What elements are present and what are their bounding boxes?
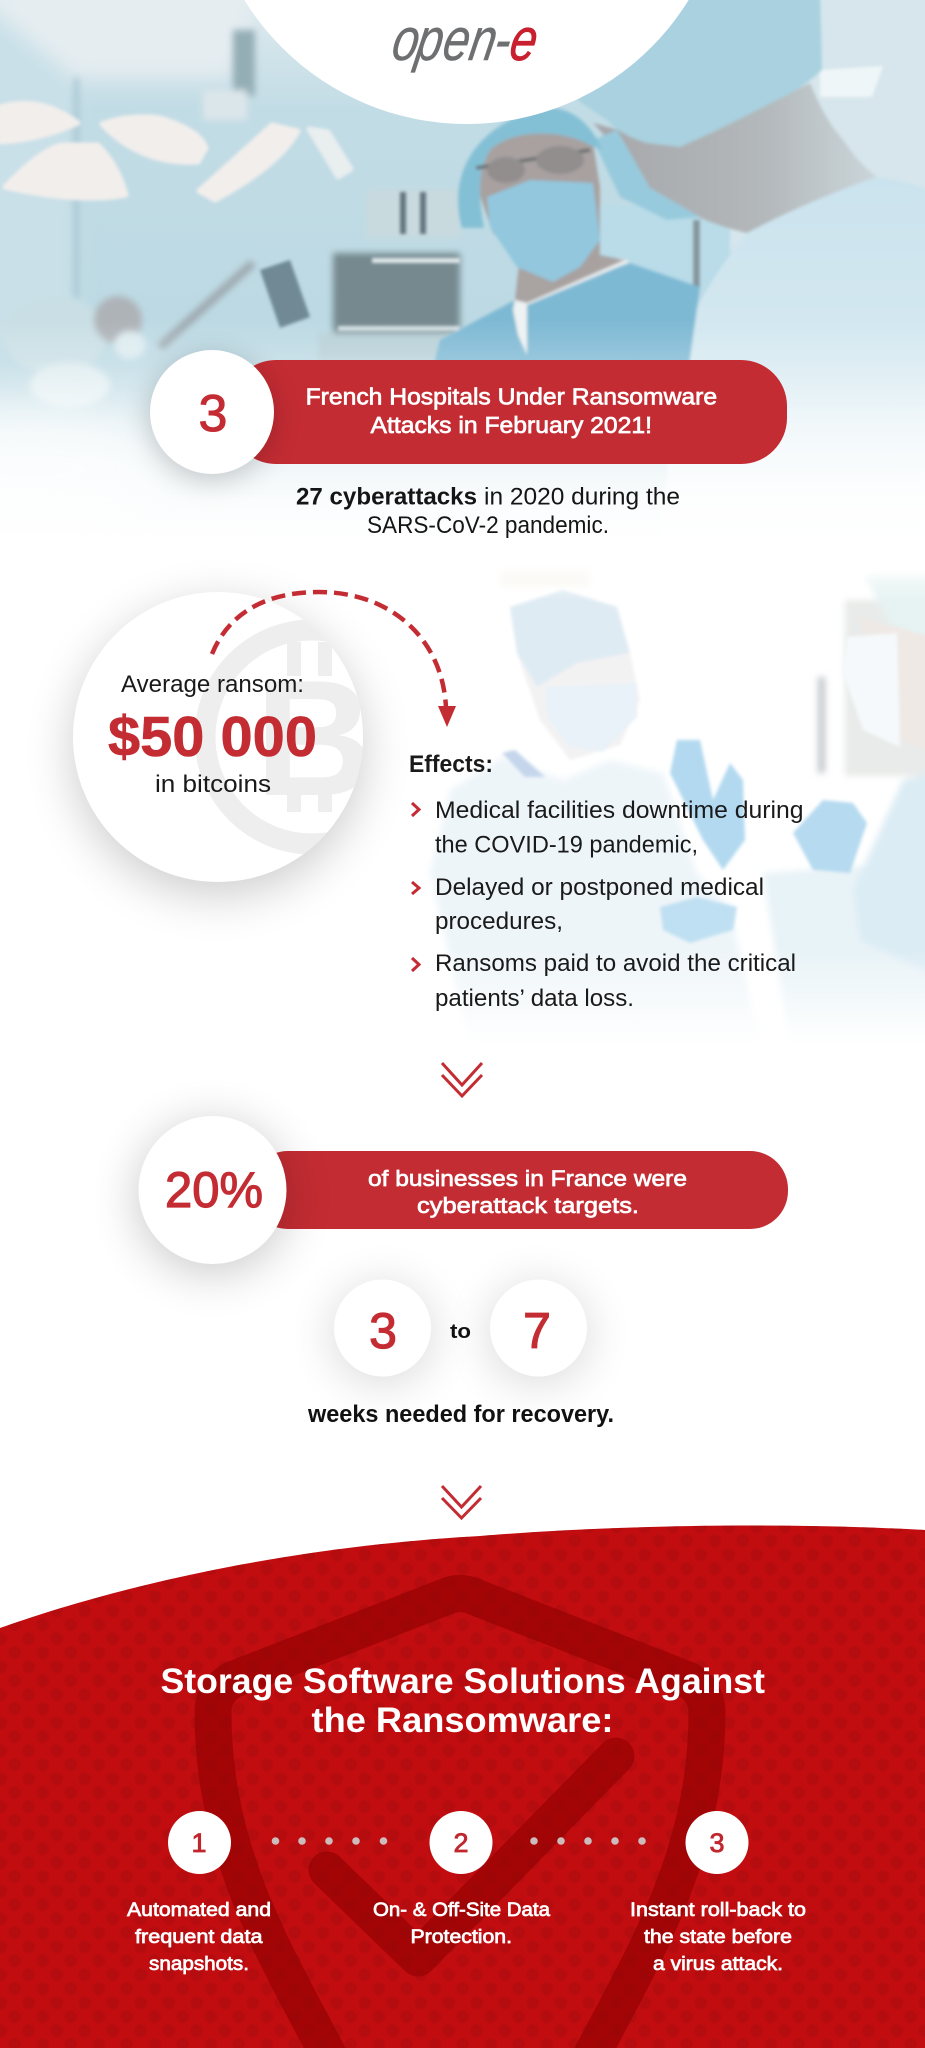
item 1: Medical facilities downtime during <box>435 797 804 824</box>
item 2: Delayed or postponed medical <box>435 874 764 901</box>
step 2: Protection. <box>410 1927 512 1948</box>
ransom text: Average ransom: <box>121 671 304 698</box>
heading <box>160 1662 765 1740</box>
ransom text: $50 000 <box>108 705 317 769</box>
step 1 <box>127 1811 271 1975</box>
banner: 20% of businesses <box>138 1116 788 1272</box>
item 3: patients’ data loss. <box>435 985 634 1012</box>
banner text: Attacks in February 2021! <box>370 412 652 438</box>
banner text: cyberattack targets. <box>417 1193 639 1218</box>
icon: bitcoin watermark: B <box>255 646 374 830</box>
arrow: dashed curve <box>212 592 456 727</box>
text: 27 cyberattacks <box>296 484 680 539</box>
item 2: procedures, <box>435 908 563 935</box>
item 2 <box>412 874 764 935</box>
recovery time: 3 to 7 weeks: to <box>450 1321 471 1343</box>
recovery time: 3 to 7 weeks <box>307 1280 614 1428</box>
arrow: double chevron 2 <box>442 1486 481 1518</box>
ransom text <box>108 671 317 798</box>
step 3: Instant roll-back to <box>630 1900 806 1921</box>
dotted connectors <box>272 1837 646 1845</box>
logo badge <box>206 0 728 124</box>
item 1 <box>412 797 804 858</box>
logo: open-e: e <box>505 6 543 73</box>
logo: open-e: open- <box>388 6 517 73</box>
number: 3: 3 <box>199 385 227 443</box>
step 1: snapshots. <box>149 1954 249 1975</box>
step 3: 3 <box>709 1828 725 1858</box>
banner text <box>368 1166 687 1218</box>
step 1: 1 <box>191 1828 207 1858</box>
step 2: On- & Off-Site Data <box>373 1900 550 1921</box>
arrow: double chevron 1 <box>442 1063 482 1096</box>
heading: the Ransomware: <box>312 1701 614 1740</box>
banner text: of businesses in France were <box>368 1166 687 1191</box>
banner text: French Hospitals Under Ransomware <box>306 384 717 410</box>
step 3: a virus attack. <box>653 1954 783 1975</box>
step 2 <box>373 1811 550 1948</box>
item 3: Ransoms paid to avoid the critical <box>435 950 796 977</box>
step 2: 2 <box>453 1828 469 1858</box>
step 1: Automated and <box>127 1900 271 1921</box>
item 1: the COVID-19 pandemic, <box>435 832 698 858</box>
recovery time: 3 to 7 weeks: 3 <box>369 1303 397 1359</box>
circle: average ransom <box>73 592 419 895</box>
panel: storage software solutions <box>0 1520 925 2048</box>
text: 27 cyberattacks: 27 cyberattacks <box>296 484 477 510</box>
heading: Storage Software Solutions Against <box>160 1662 765 1701</box>
photo: medical staff putting on gloves <box>420 555 925 1070</box>
step 1: frequent data <box>135 1927 263 1948</box>
text: 27 cyberattacks: SARS-CoV-2 pandemic. <box>367 512 609 539</box>
recovery time: 3 to 7 weeks: weeks needed for recovery. <box>307 1401 614 1428</box>
photo: surgeons in operating room <box>0 0 925 560</box>
icon: shield with check mark <box>213 1594 707 2048</box>
list: effects <box>409 751 804 1012</box>
ransom text: in bitcoins <box>155 771 271 798</box>
list: effects: Effects: <box>409 751 493 778</box>
item 3 <box>412 950 796 1012</box>
recovery time: 3 to 7 weeks: 7 <box>523 1303 551 1359</box>
text: 27 cyberattacks: in 2020 during the <box>484 484 680 510</box>
banner text <box>306 384 717 438</box>
number: 20%: 20% <box>165 1162 263 1218</box>
step 3: the state before <box>644 1927 792 1948</box>
step 3 <box>630 1811 806 1975</box>
banner: 3 French hospitals <box>150 350 787 480</box>
icon: bitcoin watermark <box>196 620 362 854</box>
